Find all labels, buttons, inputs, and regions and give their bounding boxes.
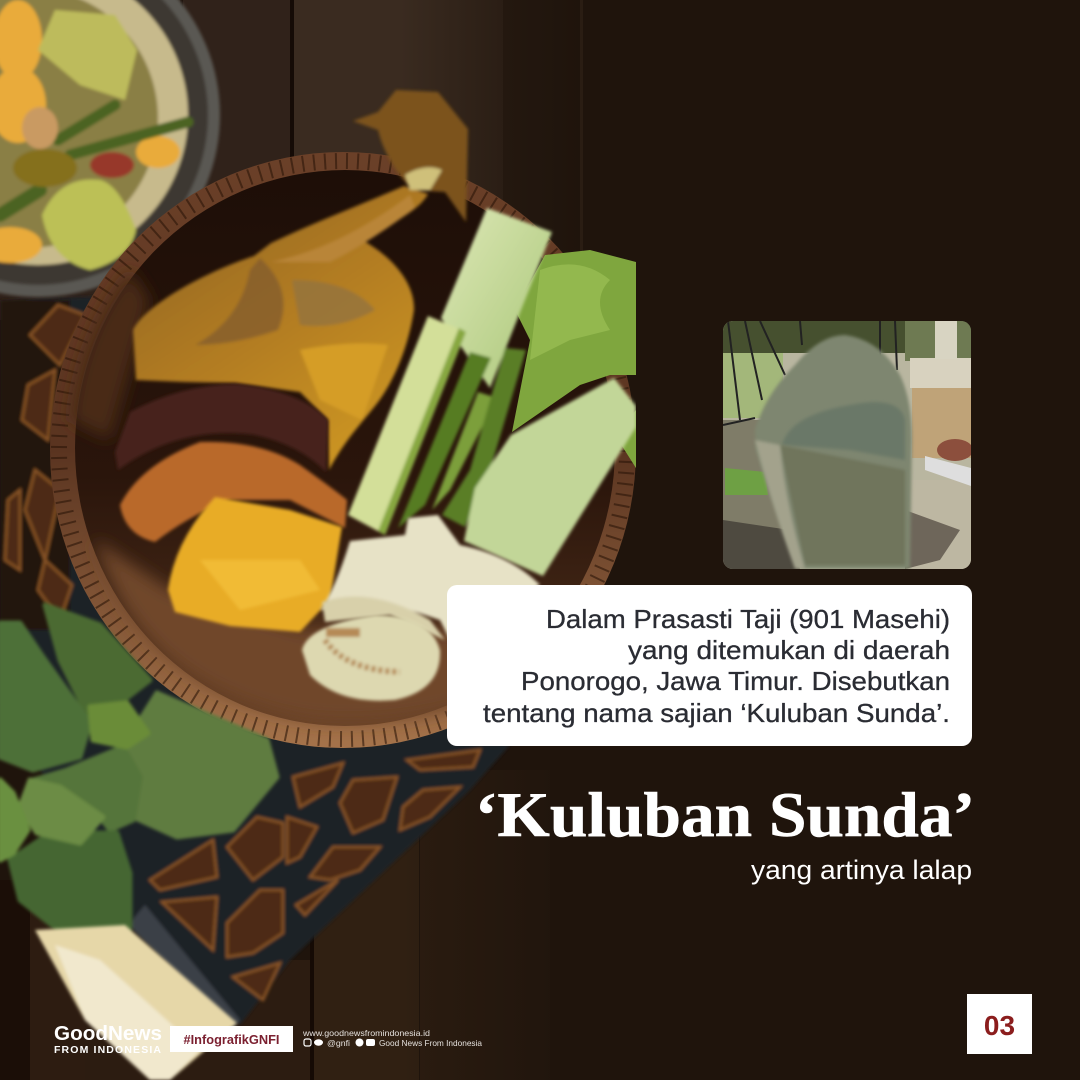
title: ‘Kuluban Sunda’ [475,779,975,850]
fried chicken [133,90,468,470]
footer logo: GoodNews [54,1023,162,1045]
stone inscription photo [723,321,973,569]
card text: tentang nama sajian ‘Kuluban Sunda’. [483,698,950,728]
footer links: www.goodnewsfromindonesia.id [302,1028,430,1038]
peanuts [13,149,77,187]
corn pieces [0,0,180,263]
chicken drumstick [353,90,468,222]
card text: yang ditemukan di daerah [628,635,950,665]
card text: Ponorogo, Jawa Timur. Disebutkan [521,666,950,696]
subtitle: yang artinya lalap [751,855,972,885]
page number [967,994,1032,1054]
mint leaves [0,605,277,952]
sliced eggplant [302,615,440,701]
card text: Dalam Prasasti Taji (901 Masehi) [546,604,950,634]
icon: facebook [356,1038,364,1046]
cucumber slices and long beans [348,208,636,576]
wooden bowl [50,152,636,748]
side bowl of vegetable soup [0,0,220,297]
batik cloth [0,296,510,1028]
green beans [0,105,188,215]
footer links [302,1028,482,1048]
card text [483,604,950,728]
cabbage [320,515,540,640]
banana leaf wrap [35,925,237,1080]
hand and notebook [925,456,971,486]
footer logo [54,1023,162,1056]
fried tofu [168,497,342,632]
hashtag badge: #InfografikGNFI [184,1032,280,1047]
footer links: Good News From Indonesia [379,1038,482,1048]
icon: twitter [314,1039,323,1046]
footer logo: FROM INDONESIA [54,1044,162,1056]
dark fried tempe [115,384,328,472]
chayote slices [38,10,137,100]
icon: youtube [366,1039,375,1046]
hashtag badge [170,1026,293,1052]
page number: 03 [984,1010,1015,1041]
footer links: @gnfi [327,1038,350,1048]
fried tempeh [120,442,347,542]
icon: instagram [304,1039,311,1046]
lettuce [512,250,636,468]
text card [447,585,972,746]
